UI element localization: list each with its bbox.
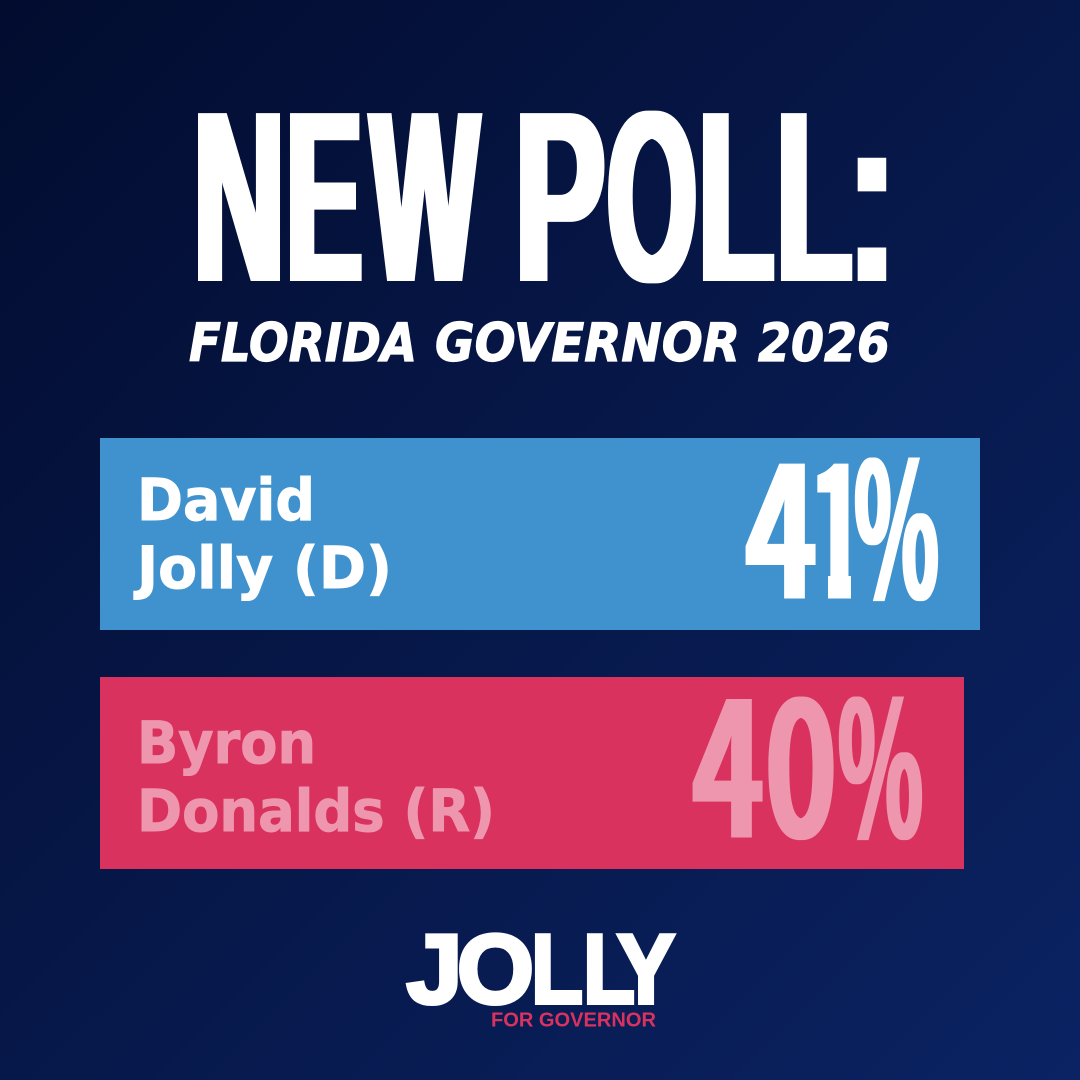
title: P [515, 60, 605, 333]
panel: Byron Donalds result: % [838, 620, 923, 892]
subtitle: 2026 [758, 313, 890, 374]
panel: David Jolly result: % [854, 382, 939, 652]
percentage: 41%: 1 [809, 382, 866, 652]
panel: Byron Donalds result [100, 620, 964, 892]
percentage: 41% [746, 458, 938, 602]
candidate name: Byron Donalds: Byron [137, 709, 316, 777]
title: O [607, 60, 697, 333]
logo tagline: FOR GOVERNOR [491, 1010, 657, 1032]
candidate name: Byron Donalds: Donalds (R) [137, 777, 495, 845]
candidate name: Byron Donalds [137, 709, 495, 845]
title: E [286, 60, 362, 333]
candidate name: David Jolly [133, 466, 392, 602]
logo wordmark: L [583, 914, 635, 1024]
logo: Jolly for Governor [406, 914, 675, 1032]
title: L [699, 60, 774, 333]
percentage: 40%: 4 [692, 620, 764, 892]
panel: David Jolly result [100, 438, 980, 630]
percentage: 41%: 4 [745, 382, 817, 652]
logo wordmark: L [531, 914, 583, 1024]
title: : [848, 60, 896, 333]
title: W [371, 60, 479, 333]
title: N [194, 60, 284, 333]
percentage: 40%: 0 [765, 620, 837, 892]
candidate name: David Jolly: Jolly (D) [133, 534, 392, 602]
subtitle: FLORIDA [189, 313, 417, 374]
logo wordmark: J [406, 914, 462, 1024]
red bar [100, 677, 964, 869]
logo wordmark: Y [617, 914, 675, 1024]
logo wordmark: O [457, 914, 534, 1024]
title: L [777, 60, 852, 333]
subtitle: GOVERNOR [435, 313, 740, 374]
candidate name: David Jolly: David [137, 466, 315, 534]
blue bar [100, 438, 980, 630]
